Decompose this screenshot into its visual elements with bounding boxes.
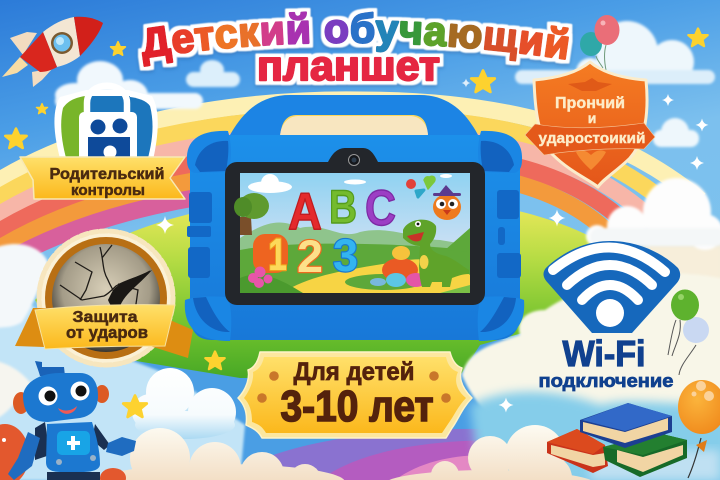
balloons behind: [0, 424, 126, 480]
letters ABC: C: [365, 180, 396, 236]
balloons: right: [668, 290, 720, 478]
clouds: bottom: [95, 368, 720, 480]
case body: [190, 135, 520, 340]
badge: shock protection: [15, 231, 193, 365]
title line 1: Детский обучающий: [137, 7, 574, 74]
balloons: top right: [580, 15, 620, 70]
lower rainbow bands: [240, 429, 540, 480]
handle: [230, 95, 478, 140]
badge: shock protection: от ударов: [66, 324, 148, 342]
left arm: [8, 432, 40, 480]
bezel: [225, 162, 485, 305]
tree: [234, 193, 269, 235]
rainbow: [0, 100, 700, 285]
digits 123: 3: [333, 230, 358, 281]
red book: [547, 429, 608, 473]
sparkles: [156, 78, 708, 412]
books: [547, 403, 687, 477]
clouds: top right: [515, 21, 715, 147]
badge: age: [238, 352, 472, 438]
clouds: right middle: [586, 178, 720, 398]
digits 123: [268, 229, 358, 282]
title: [137, 7, 574, 89]
shield: [54, 90, 158, 172]
ribbon: [35, 305, 175, 349]
orange block: [253, 234, 288, 273]
dinosaur: [403, 220, 469, 287]
letters ABC: [288, 180, 396, 241]
title line 2: планшет: [257, 42, 440, 89]
banner: контролы: [71, 182, 145, 199]
shield halves: [61, 96, 153, 165]
screen balloons: [406, 176, 435, 197]
scalloped medal: [39, 231, 173, 365]
ears: [13, 392, 29, 414]
tablet: [185, 95, 524, 341]
badge: age: Для детей: [294, 358, 414, 386]
easter eggs: [370, 246, 426, 287]
badge: durable shield: [525, 62, 655, 187]
blue book: [580, 403, 672, 448]
side buttons: [187, 190, 521, 278]
clouds: top left: [55, 60, 240, 110]
owl: [433, 185, 461, 220]
camera: [328, 148, 378, 166]
banner: [20, 157, 185, 199]
icon: padlock: [79, 86, 137, 167]
corner bumpers: [185, 131, 524, 341]
head: [23, 373, 98, 422]
wifi caption: [538, 333, 674, 391]
robot: [0, 361, 136, 480]
wifi caption: подключение: [538, 371, 674, 391]
badge: shock protection: Защита: [72, 309, 138, 326]
wifi icon: [544, 241, 680, 333]
badge: durable shield: Прончий: [555, 95, 625, 112]
letters ABC: B: [329, 180, 357, 233]
antenna: [35, 361, 65, 376]
badge: age: 3-10 лет: [280, 382, 434, 431]
wifi caption: Wi-Fi: [562, 333, 646, 374]
stars: [5, 28, 708, 417]
right arm: [106, 437, 136, 456]
lower sky band: [100, 340, 560, 480]
shield body: [534, 62, 647, 187]
banner: Родительский: [50, 166, 164, 183]
badge: durable shield: и: [588, 110, 596, 126]
badge: parental control: [20, 86, 185, 199]
torso: [46, 422, 100, 472]
green book: [603, 433, 687, 477]
badge: durable shield: ударостоикий: [538, 130, 646, 147]
green hill: [35, 195, 640, 378]
legs and arm joints: [35, 422, 110, 480]
letters ABC: A: [288, 183, 322, 241]
ribbon: [525, 123, 655, 155]
icon: rocket: [2, 17, 103, 87]
digits 123: 1: [268, 229, 287, 280]
ribbon tails: [15, 308, 46, 347]
cracks: [60, 245, 150, 318]
flower: [248, 266, 272, 288]
clouds: around wifi: [462, 273, 720, 480]
screen: [234, 173, 470, 293]
clouds: left: [0, 244, 245, 480]
digits 123: 2: [297, 231, 323, 282]
